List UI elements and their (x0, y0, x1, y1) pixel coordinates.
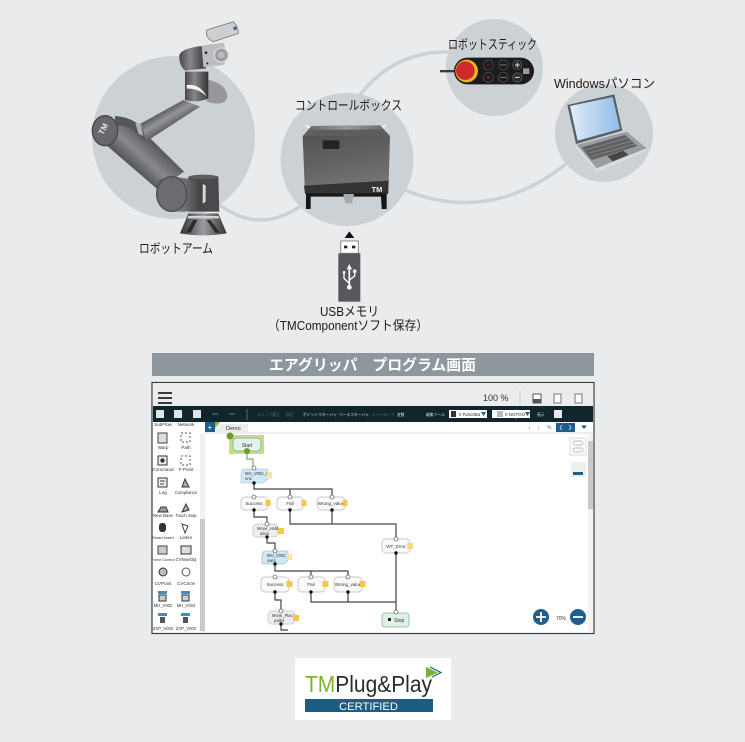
panel: program screen (151, 382, 594, 634)
top bar: 100 % (483, 393, 509, 403)
flow nodes: second branch row: Fail (307, 582, 315, 587)
side panel: component list: ZXP_V002 (176, 626, 197, 631)
icon: control box: TM (372, 185, 382, 194)
flow node: Move_Place: pallet (274, 618, 285, 623)
label: robot stick: ロボットスティック (448, 37, 537, 52)
side panel: component list: MH_V002 (177, 603, 196, 608)
flow node: Move_Hold (253, 522, 284, 539)
circle: robot arm backdrop (92, 56, 255, 219)
flow nodes: second branch row: Success (266, 582, 284, 587)
flow node: Stop: Stop (394, 618, 405, 624)
icon: robot stick (440, 58, 534, 84)
zoom controls (533, 609, 586, 625)
flow node: WT_Error (382, 537, 413, 555)
label: robot arm: ロボットアーム (139, 241, 213, 256)
logo wordmark: TMPlug&Play (305, 671, 432, 697)
dark toolbar (153, 406, 593, 422)
flow node: MH_V002_Open1: en1 (245, 476, 253, 481)
icon: robot arm (92, 22, 238, 235)
zoom controls: 70% (556, 616, 567, 622)
dark toolbar: 変数 (397, 412, 405, 417)
flow node: Move_Hold: ation (260, 531, 270, 536)
side panel: component list: Warp (158, 445, 169, 450)
flow node: Move_Place (268, 609, 299, 626)
dark toolbar: 0 NOTOO (505, 412, 526, 417)
flow node: Start (226, 432, 264, 467)
side panel: component list (151, 422, 205, 632)
dark toolbar: エンドロード (372, 413, 395, 417)
flow node: Stop (382, 610, 409, 627)
logo: TM Plug & Play certified (295, 658, 451, 720)
side panel: component list: Compliance (175, 490, 198, 495)
icon: USB memory stick (338, 231, 360, 302)
flow nodes: second branch row: Wrong_value (335, 582, 362, 587)
side panel: component list: SubFlow (154, 422, 173, 427)
connection cable: control box to laptop (405, 163, 567, 203)
dark toolbar: ベースマネージャ (339, 412, 369, 417)
side panel: component list: New Base (153, 513, 174, 518)
flow node: WT_Error: WT_Error (386, 544, 406, 549)
tab row: + (208, 423, 212, 432)
logo: TM Plug & Play certified: CERTIFIED (339, 701, 398, 713)
side panel: component list: CVPoint (155, 581, 172, 586)
flow connectors (254, 483, 396, 630)
flow node: MH_V002_Close: MH_V002_Cl (267, 553, 292, 558)
tab row: ↕ (537, 425, 540, 431)
dark toolbar: 0 RobotBa (459, 412, 481, 417)
dark toolbar: ポイントマネージャ (303, 412, 337, 417)
heading banner: エアグリッパ プログラム画面 (269, 356, 476, 374)
side panel: component list: Network (178, 422, 195, 427)
label: USB memory: USBメモリ (320, 304, 379, 319)
label: control box: コントロールボックス (295, 98, 402, 113)
right tool icons and scrollbar (570, 434, 593, 633)
flow nodes: first branch row (241, 495, 348, 512)
icon: robot arm: TM (97, 122, 110, 136)
flow node: MH_V002_Open1: MH_V002_Op (245, 471, 272, 476)
label: TMComponent software storage: （TMComponentソフト保存） (268, 318, 428, 333)
connection cable: control box to robot stick (360, 52, 452, 95)
heading banner (152, 353, 594, 376)
flow nodes: first branch row: Success (245, 501, 263, 506)
flow node: Start: Start (242, 443, 253, 449)
flow node: MH_V002_Close: ose1 (267, 558, 277, 563)
icon: laptop (567, 94, 647, 172)
side panel: component list: Listen (180, 535, 193, 540)
circle: laptop backdrop (555, 84, 653, 182)
side panel: component list: Command (152, 467, 174, 472)
side panel: component list: Smart Insert (152, 535, 175, 540)
dark toolbar: ステップ実行 (257, 412, 280, 417)
connection cable: arm to control box (220, 205, 302, 220)
side panel: component list: Log (159, 490, 167, 495)
flow nodes: first branch row: Fail (286, 501, 294, 506)
flow node: MH_V002_Close (262, 549, 292, 566)
flow node: Move_Place: Move_Place (272, 613, 296, 618)
side panel: component list: Touch Stop (176, 513, 197, 518)
label: laptop: Windowsパソコン (554, 76, 655, 91)
tab row: ↕ (528, 425, 530, 431)
tab row: Demo (226, 426, 241, 432)
flow node: MH_V002_Open1 (241, 466, 272, 485)
side panel: component list: Path (181, 445, 191, 450)
dark toolbar: 表示 (537, 412, 545, 417)
tab row (205, 422, 593, 434)
side panel: component list: ZXP_V002 (153, 626, 174, 631)
tab row: % (547, 425, 552, 431)
side panel: component list: CVNewObj (176, 557, 196, 562)
flow nodes: first branch row: Wrong_value (318, 501, 345, 506)
top bar (153, 383, 593, 406)
circle: robot stick backdrop (446, 19, 543, 116)
side panel: component list: F-Point (179, 467, 194, 472)
circle: control box backdrop (280, 93, 414, 226)
flow nodes: second branch row (261, 575, 366, 594)
side panel: component list: MH_V002 (154, 603, 173, 608)
dark toolbar: 編集ツール (426, 412, 445, 417)
icon: control box (303, 124, 390, 209)
flow node: Move_Hold: Move_Hold (257, 526, 279, 531)
side panel: component list: CVCircle (177, 581, 196, 586)
dark toolbar: 設定 (286, 412, 294, 417)
side panel: component list: Force Control (151, 558, 175, 562)
